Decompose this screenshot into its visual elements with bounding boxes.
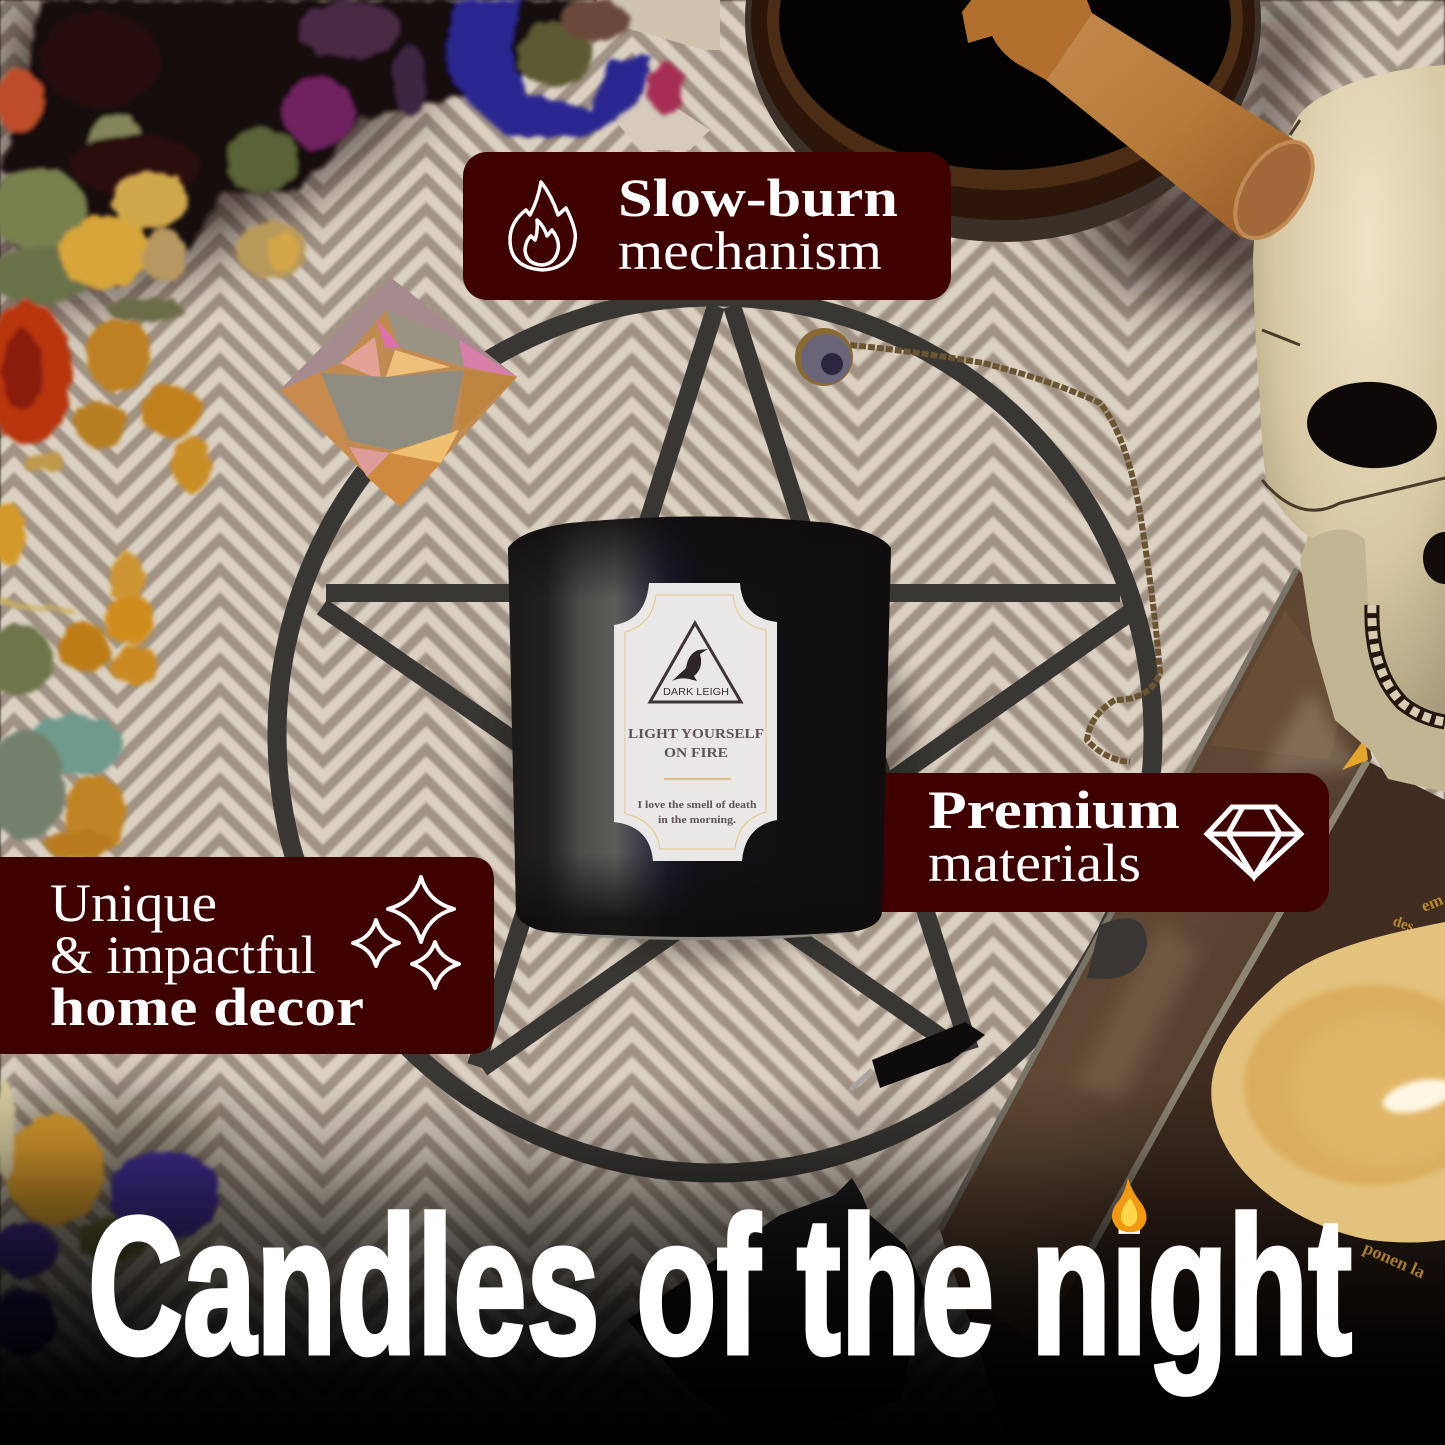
panel: unique and impactful home decor <box>0 857 494 1054</box>
panel: unique and impactful home decor: home decor <box>50 977 364 1037</box>
dried flowers: left side orange and teal <box>0 503 159 859</box>
white candle stub behind flowers <box>597 0 720 150</box>
pentagram circle and star <box>277 297 1153 1173</box>
dried flowers: bottom left <box>0 1080 220 1356</box>
open book with wooden band <box>940 569 1445 1445</box>
jar shadow on the rug <box>495 560 915 960</box>
candle jar <box>508 516 891 940</box>
dried flowers: red strawflower and orange clusters <box>0 301 212 493</box>
book page text: em <box>1418 890 1445 916</box>
wooden pestle <box>962 0 1329 252</box>
teeth <box>1372 605 1445 722</box>
logo: triangle with raven <box>650 623 741 702</box>
lit wax candle <box>1211 922 1445 1242</box>
label text: LIGHT YOURSELF <box>628 727 764 742</box>
dried flowers: green leaves, yellow roses and bud <box>0 168 306 322</box>
panel: premium materials: Premium <box>928 780 1180 840</box>
nose cavity <box>1423 532 1445 584</box>
panel: unique and impactful home decor: Unique <box>50 873 217 933</box>
open book with wooden band: des <box>1391 914 1416 935</box>
skull <box>1253 65 1445 792</box>
icon: sparkles <box>353 877 459 988</box>
crystal pendant <box>850 1022 985 1090</box>
icon: small flame above the title <box>1112 1178 1147 1232</box>
icon: diamond <box>1207 807 1301 877</box>
dried flowers: top left bouquet <box>0 0 683 250</box>
panel: premium materials: materials <box>928 833 1141 893</box>
panel: slow-burn mechanism <box>463 152 951 300</box>
icon: flame <box>510 182 575 270</box>
panel: slow-burn mechanism: mechanism <box>618 221 882 281</box>
panel: premium materials <box>840 773 1329 912</box>
logo: triangle with raven: DARK LEIGH <box>663 686 729 698</box>
jar label: in the morning. <box>658 815 736 826</box>
mortar bowl <box>745 0 1261 242</box>
eye socket <box>1305 379 1439 471</box>
pendant: amethyst sphere with chain <box>795 328 1160 762</box>
jar label: ON FIRE <box>664 746 728 761</box>
dark glove at bottom <box>627 1178 925 1445</box>
soft shadows on the rug <box>0 0 1320 1260</box>
jar label: I love the smell of death <box>638 800 757 811</box>
prism crystal <box>280 277 517 507</box>
book page text near the candle: ponen la <box>1360 1237 1428 1282</box>
panel: slow-burn mechanism: Slow-burn <box>618 168 898 228</box>
jar label <box>614 583 777 861</box>
bottom dark gradient <box>0 1080 1445 1445</box>
flame <box>1379 1073 1445 1119</box>
panel: unique and impactful home decor: & impactful <box>50 925 316 985</box>
